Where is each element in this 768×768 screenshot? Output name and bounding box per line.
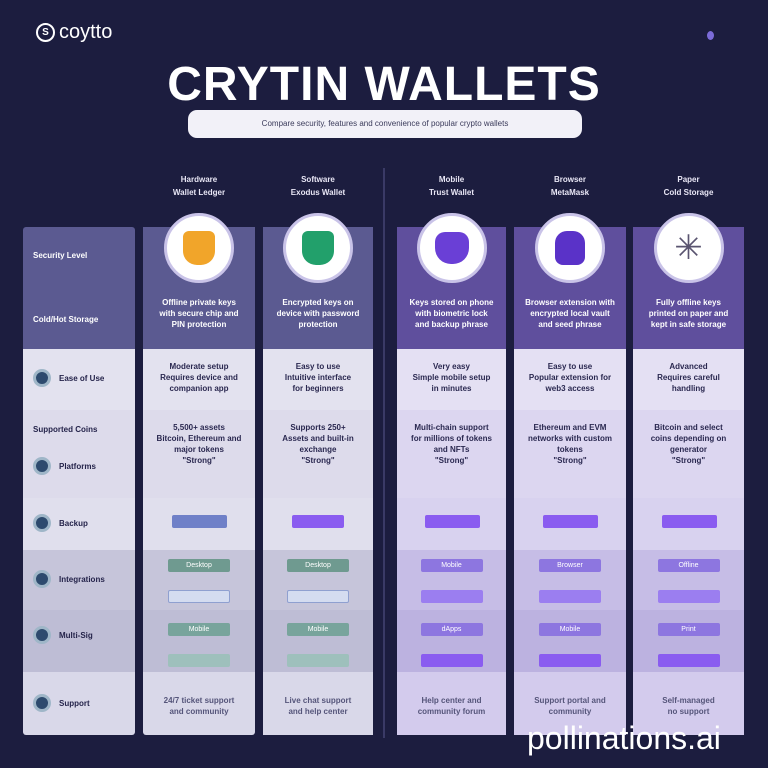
panel: Ledger column: with secure chip and [159, 309, 239, 318]
panel: Exodus column: Intuitive interface [285, 373, 351, 382]
panel: Paper column: "Strong" [672, 456, 705, 465]
text: Mobile [439, 175, 464, 184]
column headers: Wallet Ledger [173, 188, 225, 197]
panel: Ledger column: Requires device and [160, 373, 238, 382]
panel: Exodus column: Easy to use [296, 362, 340, 371]
panel: label column: Cold/Hot Storage [33, 315, 98, 324]
panel: Paper column: Advanced [669, 362, 708, 371]
panel: label column: Ease of Use [59, 374, 104, 383]
panel: Exodus column: exchange [300, 445, 336, 454]
panel: Trust Wallet column: Keys stored on phone [409, 298, 494, 307]
panel: Exodus column: Desktop [305, 562, 331, 569]
logo: S [42, 26, 49, 38]
subtitle bar: Compare security, features and convenience of popular crypto wallets [262, 119, 508, 128]
icon: purple shield [416, 213, 486, 283]
panel: label column: Backup [59, 519, 88, 528]
panel: Paper column: Print [681, 626, 696, 633]
text: Paper [677, 175, 700, 184]
panel: Ledger column: Moderate setup [169, 362, 229, 371]
panel: Ledger column: 24/7 ticket support [164, 696, 234, 705]
panel: Paper column: no support [668, 707, 709, 716]
panel: Ledger column: Mobile [189, 626, 209, 633]
panel: Ledger column: Desktop [186, 562, 212, 569]
panel: Trust Wallet column: Very easy [433, 362, 470, 371]
icon: orange shield [164, 213, 234, 283]
column headers: Hardware [181, 175, 217, 184]
text: Browser [554, 175, 586, 184]
panel: MetaMask column: Ethereum and EVM [534, 423, 606, 432]
panel: Paper column: handling [672, 384, 705, 393]
logo [36, 20, 112, 42]
icon: asterisk: ✳ [674, 229, 703, 267]
panel: Ledger column: major tokens [174, 445, 224, 454]
panel: Paper column: printed on paper and [649, 309, 728, 318]
panel: Exodus column: "Strong" [301, 456, 335, 465]
watermark: pollinations.ai [527, 720, 721, 756]
panel: MetaMask column: Browser [557, 562, 583, 569]
panel: Ledger column: Offline private keys [162, 298, 236, 307]
panel: Exodus column: protection [298, 320, 338, 329]
panel: MetaMask column: Browser extension with [525, 298, 615, 307]
panel: MetaMask column: Popular extension for [529, 373, 611, 382]
panel: Ledger column: companion app [169, 384, 229, 393]
panel: Ledger column: "Strong" [182, 456, 216, 465]
panel: MetaMask column: web3 access [546, 384, 594, 393]
panel: label column: Support [59, 699, 90, 708]
icon: purple fox [535, 213, 605, 283]
panel: Trust Wallet column: in minutes [431, 384, 472, 393]
panel: label column: Security Level [33, 251, 87, 260]
subtitle bar [188, 110, 582, 138]
text: Software [301, 175, 335, 184]
panel: Trust Wallet column: "Strong" [435, 456, 468, 465]
panel: MetaMask column: Mobile [560, 626, 580, 633]
panel: Trust Wallet column: community forum [418, 707, 485, 716]
panel: Ledger column: 5,500+ assets [173, 423, 225, 432]
panel: Paper column: coins depending on [651, 434, 726, 443]
panel: MetaMask column: Easy to use [548, 362, 592, 371]
text: Trust Wallet [429, 188, 474, 197]
icon: asterisk [654, 213, 724, 283]
panel: Paper column: Fully offline keys [656, 298, 721, 307]
panel: Trust Wallet column: with biometric lock [415, 309, 488, 318]
panel: label column: Supported Coins [33, 425, 97, 434]
panel: Ledger column: Bitcoin, Ethereum and [157, 434, 241, 443]
panel: Exodus column: and help center [288, 707, 348, 716]
panel: Trust Wallet column: Multi-chain support [414, 423, 489, 432]
panel: Trust Wallet column: Simple mobile setup [413, 373, 490, 382]
panel: Ledger column: and community [169, 707, 229, 716]
panel: label column: Platforms [59, 462, 96, 471]
panel: Paper column: Bitcoin and select [654, 423, 723, 432]
panel: label column [23, 227, 135, 735]
panel: Exodus column: Supports 250+ [290, 423, 346, 432]
column headers [172, 175, 225, 197]
panel: MetaMask column: "Strong" [553, 456, 587, 465]
panel: label column: Multi-Sig [59, 631, 93, 640]
panel: MetaMask column: networks with custom [528, 434, 612, 443]
panel: Paper column: Self-managed [662, 696, 715, 705]
panel: Exodus column: for beginners [292, 384, 344, 393]
panel: MetaMask column: tokens [557, 445, 583, 454]
panel: Exodus column: Encrypted keys on [282, 298, 354, 307]
panel: Exodus column: Mobile [308, 626, 328, 633]
text: Cold Storage [664, 188, 713, 197]
panel: MetaMask column: Support portal and [534, 696, 606, 705]
panel: Paper column: generator [670, 445, 707, 454]
panel: Paper column: Offline [678, 562, 699, 569]
panel: Exodus column: device with password [277, 309, 359, 318]
panel: Trust Wallet column: for millions of tokens [411, 434, 492, 443]
panel: label column: Integrations [59, 575, 105, 584]
panel: Exodus column: Assets and built-in [282, 434, 354, 443]
panel: Ledger column [143, 213, 255, 735]
panel: MetaMask column [514, 213, 626, 735]
title: CRYTIN WALLETS [167, 58, 601, 111]
panel: Trust Wallet column [397, 213, 506, 735]
panel: MetaMask column: community [549, 707, 591, 716]
panel: MetaMask column: encrypted local vault [530, 309, 610, 318]
decorative dot [707, 31, 714, 40]
panel: Exodus column: Live chat support [285, 696, 351, 705]
panel: Ledger column: PIN protection [172, 320, 226, 329]
panel: Exodus column [263, 213, 373, 735]
text: MetaMask [551, 188, 589, 197]
logo: coytto [59, 20, 112, 42]
panel: Trust Wallet column: Mobile [441, 562, 462, 569]
panel: Trust Wallet column: Help center and [421, 696, 482, 705]
icon: green shield [283, 213, 353, 283]
panel: Trust Wallet column: and NFTs [434, 445, 469, 454]
panel: Paper column: Requires careful [657, 373, 720, 382]
text: Exodus Wallet [291, 188, 345, 197]
panel: MetaMask column: and seed phrase [538, 320, 602, 329]
panel: Paper column: kept in safe storage [651, 320, 726, 329]
panel: Trust Wallet column: and backup phrase [415, 320, 488, 329]
divider [383, 168, 385, 738]
panel: Paper column [633, 213, 744, 735]
panel: Trust Wallet column: dApps [442, 626, 461, 633]
